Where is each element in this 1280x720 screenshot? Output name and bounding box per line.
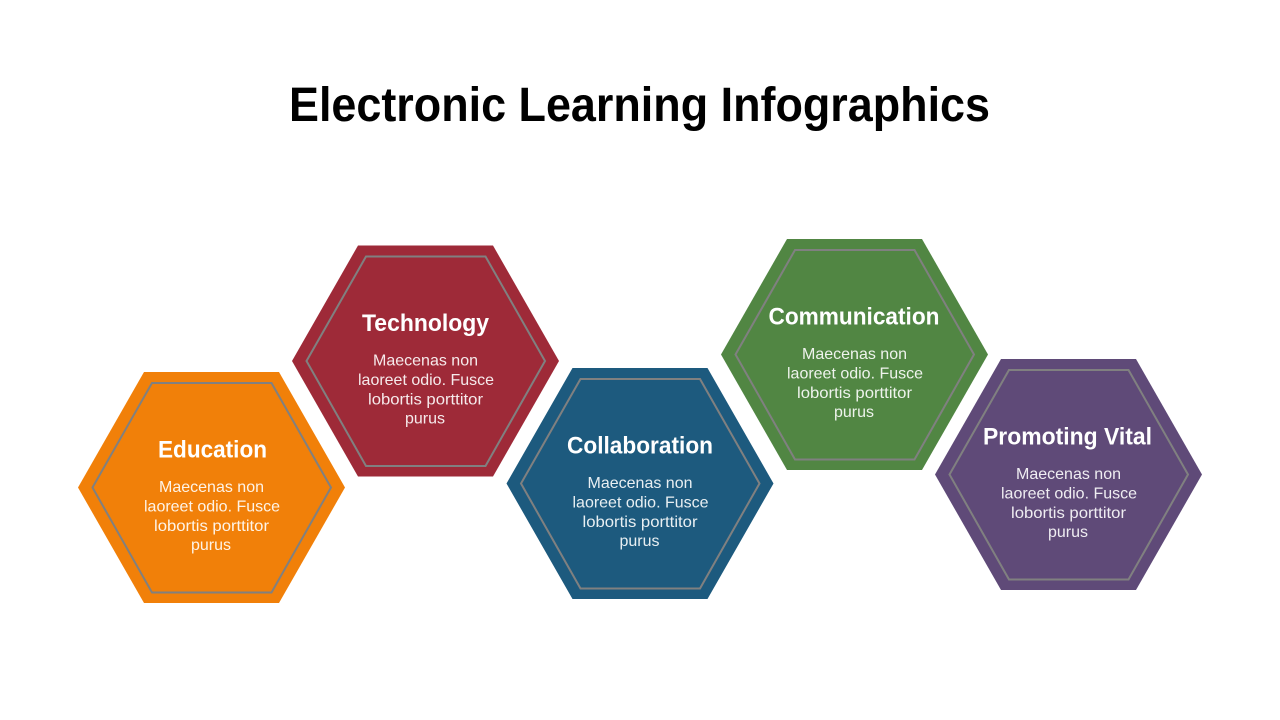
heading: Communication: Communication bbox=[768, 304, 940, 330]
text block: Promoting Vital description: Maecenas non bbox=[1016, 466, 1121, 483]
text block: Education description: lobortis porttitor bbox=[154, 518, 270, 535]
heading: Collaboration: Collaboration bbox=[567, 432, 713, 460]
heading: Technology: Technology bbox=[362, 310, 490, 337]
text block: Education description: Maecenas non bbox=[159, 479, 264, 496]
text block: Promoting Vital description: lobortis porttitor bbox=[1011, 505, 1127, 522]
text block: Education description: laoreet odio. Fusce bbox=[144, 498, 280, 516]
panel: Promoting Vital hexagon bbox=[935, 359, 1202, 590]
text block: Collaboration description: Maecenas non bbox=[588, 475, 692, 492]
title: Electronic Learning Infographics bbox=[289, 79, 990, 132]
text block: Collaboration description: laoreet odio. Fusce bbox=[572, 494, 709, 512]
panel: Education hexagon bbox=[78, 372, 345, 603]
text block: Communication description: lobortis porttitor bbox=[797, 385, 913, 402]
text block: Technology description bbox=[358, 352, 494, 428]
text block: Education description bbox=[144, 479, 280, 554]
text block: Collaboration description: purus bbox=[620, 533, 660, 550]
text block: Collaboration description: lobortis porttitor bbox=[582, 514, 698, 531]
text block: Technology description: Maecenas non bbox=[373, 352, 478, 370]
text block: Promoting Vital description: laoreet odio. Fusce bbox=[1001, 486, 1137, 502]
text block: Communication description bbox=[787, 346, 923, 421]
panel: Technology hexagon bbox=[292, 246, 559, 476]
text block: Collaboration description bbox=[572, 475, 709, 550]
text block: Education description: purus bbox=[191, 537, 231, 554]
text block: Technology description: purus bbox=[405, 410, 445, 428]
text block: Communication description: laoreet odio. Fusce bbox=[787, 366, 923, 382]
text block: Communication description: Maecenas non bbox=[802, 346, 907, 363]
text block: Technology description: lobortis porttitor bbox=[368, 392, 484, 408]
panel: Collaboration hexagon bbox=[506, 368, 774, 599]
heading: Education: Education bbox=[158, 436, 267, 464]
text block: Technology description: laoreet odio. Fusce bbox=[358, 372, 494, 389]
panel: Communication hexagon bbox=[721, 239, 988, 470]
text block: Promoting Vital description: purus bbox=[1048, 524, 1088, 541]
heading: Promoting Vital: Promoting Vital bbox=[983, 424, 1152, 450]
text block: Communication description: purus bbox=[834, 404, 874, 421]
text block: Promoting Vital description bbox=[1001, 466, 1137, 541]
